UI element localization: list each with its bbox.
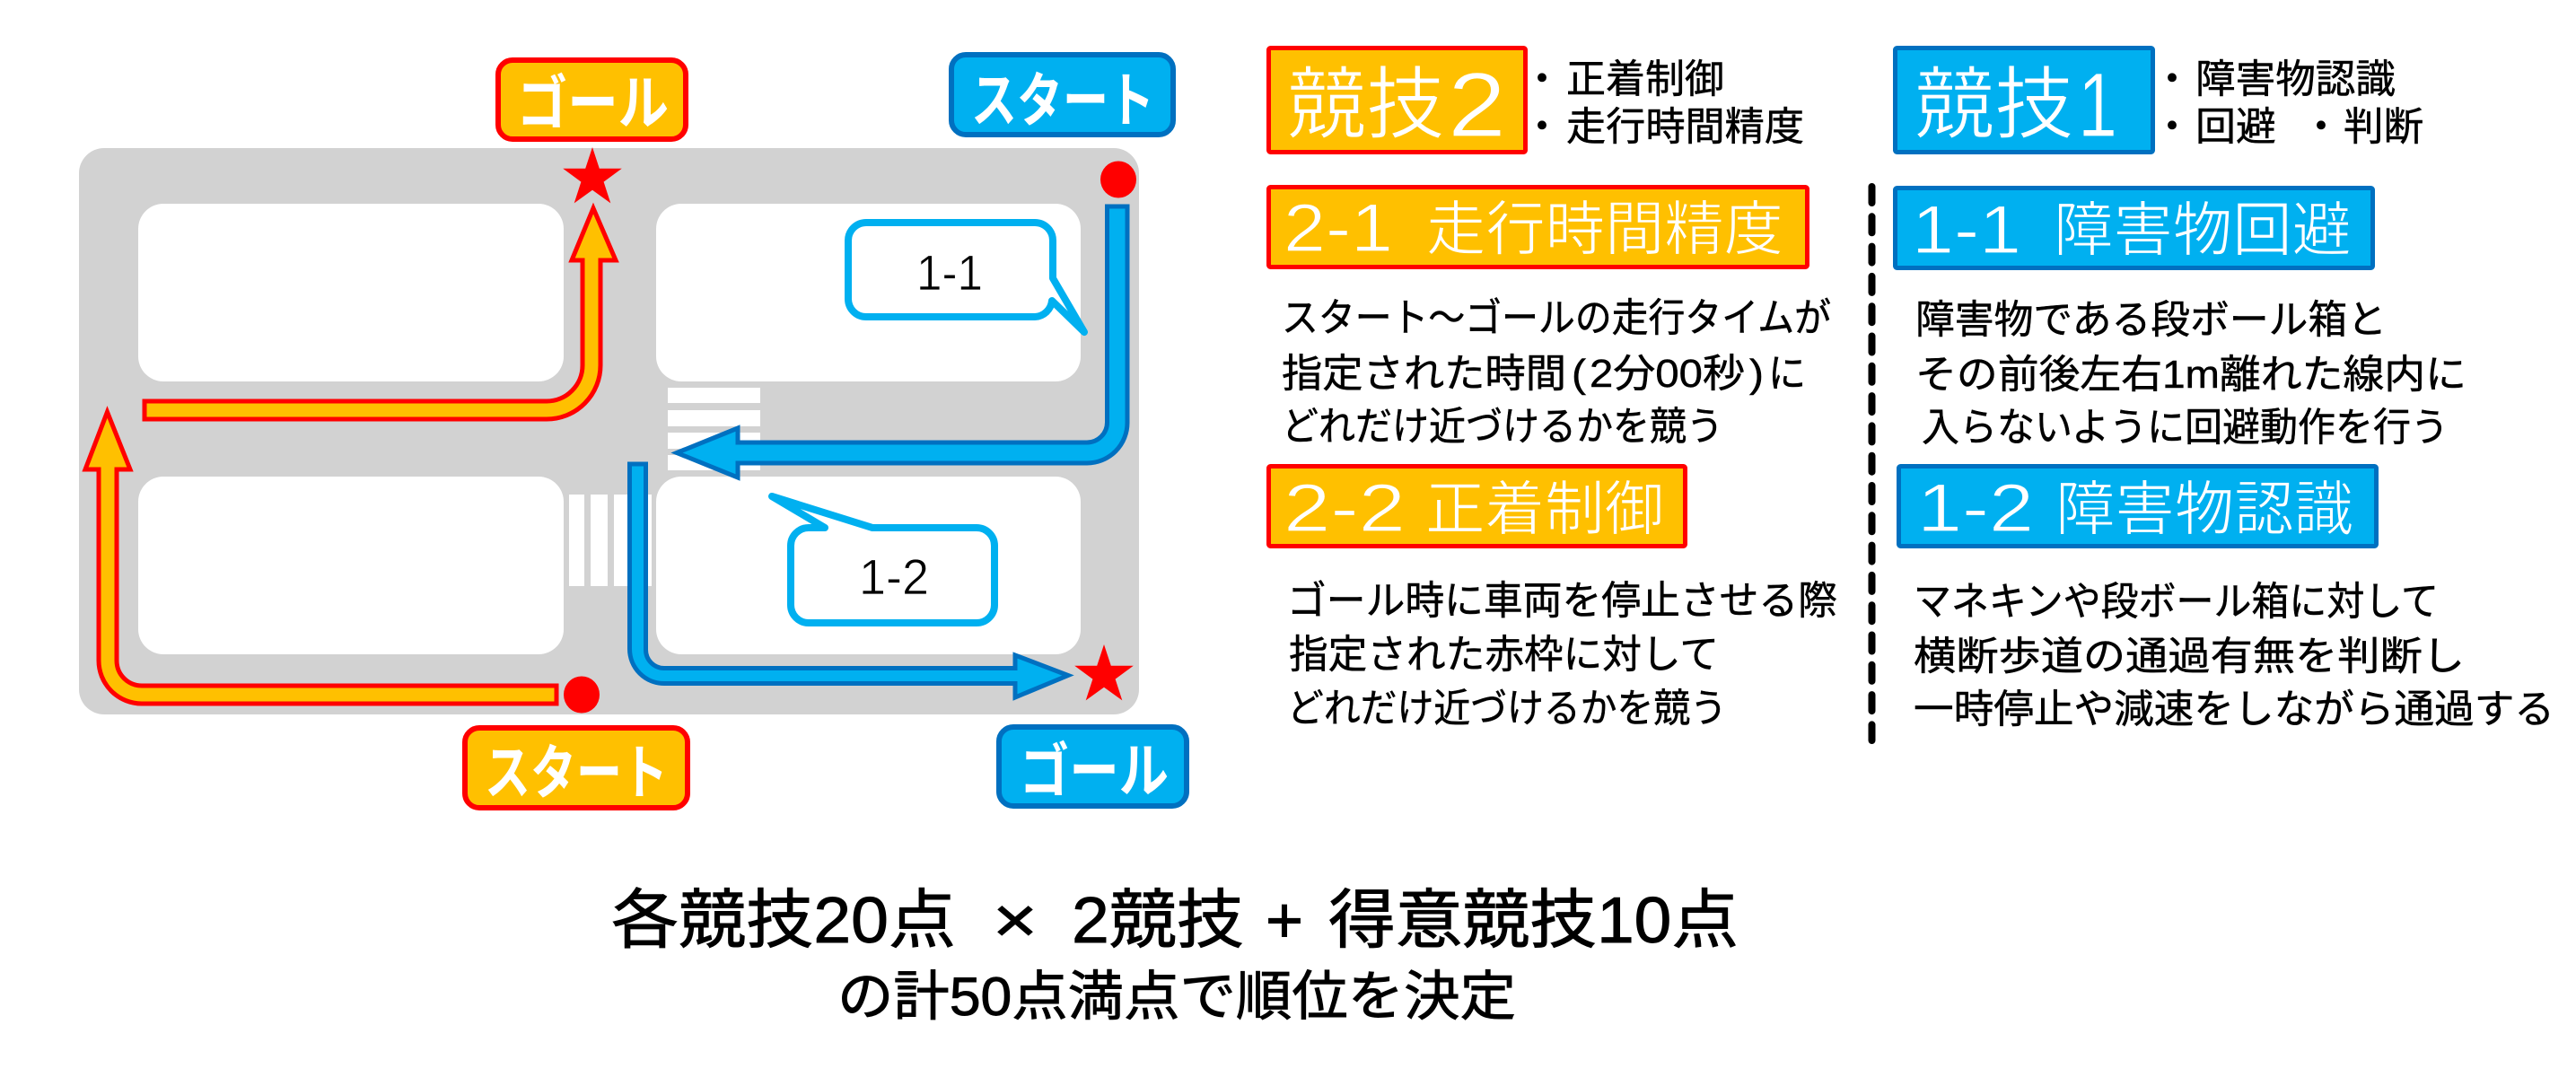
heading: event 1	[1896, 48, 2152, 156]
label: orange start: スタート	[485, 740, 668, 806]
subheading: 2-1: 2-1	[1284, 190, 1393, 267]
goal star: orange route	[563, 147, 622, 203]
text block: 1-1 description: 入らないように回避動作を行う	[1922, 406, 2449, 450]
subheading: 1-2: 障害物認識	[2055, 476, 2353, 542]
text block: scoring formula	[611, 885, 1739, 957]
text block: 2-1 description: )	[1749, 352, 1764, 396]
subheading: 1-1	[1896, 188, 2373, 268]
text block: 1-2 description	[1914, 580, 2554, 731]
text block: scoring formula: ×	[993, 885, 1038, 957]
subheading: 2-2	[1269, 467, 1686, 547]
text block: 1-2 description: 横断歩道の通過有無を判断し	[1914, 635, 2465, 679]
arrow: orange route second leg	[145, 208, 616, 419]
heading: event 2: 2	[1448, 54, 1506, 156]
text block: 2-1 description: スタート～ゴールの走行タイムが	[1282, 296, 1831, 340]
label: blue goal: ゴール	[1020, 738, 1169, 804]
list: event 2 topics: ・	[1522, 105, 1562, 149]
text block: 2-2 description: どれだけ近づけるかを競う	[1287, 687, 1727, 731]
heading: event 2	[1269, 48, 1526, 156]
subheading: 1-1: 1-1	[1912, 192, 2021, 268]
list: event 2 topics: ・	[1522, 57, 1562, 101]
heading: event 1: 競技	[1914, 60, 2074, 149]
subheading: 1-2: 1-2	[1917, 470, 2034, 547]
list: event 2 topics	[1522, 57, 1804, 149]
subheading: 2-2: 2-2	[1284, 470, 1406, 547]
text block: scoring formula: +	[1266, 885, 1303, 957]
list: event 1 topics: ・	[2152, 105, 2192, 149]
text block: 2-2 description: ゴール時に車両を停止させる際	[1287, 579, 1837, 623]
callout: 1-1	[848, 223, 1084, 332]
start point: blue route	[1100, 162, 1136, 197]
arrow: blue route second leg	[630, 464, 1068, 697]
start point: orange route	[564, 677, 600, 713]
subheading: 1-1: 障害物回避	[2054, 197, 2352, 263]
text block: 1-1 description: その前後左右1m離れた線内に	[1915, 353, 2466, 397]
label: blue start: スタート	[971, 67, 1154, 134]
city block: top left	[138, 204, 564, 381]
subheading: 2-1: 走行時間精度	[1426, 196, 1783, 262]
text block: 2-2 description	[1287, 579, 1837, 731]
list: event 2 topics: 走行時間精度	[1566, 105, 1804, 149]
text block: 2-1 description: (	[1572, 352, 1586, 396]
subheading: 1-2	[1899, 467, 2377, 547]
text block: scoring formula: 2競技	[1072, 885, 1244, 957]
text block: 1-1 description: 障害物である段ボール箱と	[1915, 298, 2387, 342]
goal star: blue route	[1074, 644, 1134, 700]
heading: event 2: 競技	[1287, 60, 1445, 149]
list: event 1 topics: 障害物認識	[2195, 57, 2396, 101]
arrow: orange route first leg	[85, 412, 556, 704]
panel: event 2 description	[1269, 48, 1837, 731]
crosswalk: vertical stripes	[569, 495, 652, 586]
callout: 1-2	[772, 496, 994, 623]
panel: event 1 description	[1896, 48, 2554, 731]
list: event 1 topics: 回避	[2195, 105, 2276, 149]
text block: 2-1 description: どれだけ近づけるかを競う	[1282, 405, 1723, 449]
label: orange goal: ゴール	[517, 70, 669, 136]
text block: 2-2 description: 指定された赤枠に対して	[1289, 633, 1719, 677]
callout: 1-2: 1-2	[859, 548, 929, 605]
city block: bottom left	[138, 477, 564, 654]
text block: scoring summary: の計50点満点で順位を決定	[837, 967, 1516, 1027]
list: event 2 topics: 正着制御	[1566, 57, 1724, 101]
list: event 1 topics: ・	[2152, 57, 2192, 101]
panel: course map	[79, 55, 1187, 808]
city block: bottom right	[656, 477, 1081, 654]
text block: 1-2 description: 一時停止や減速をしながら通過する	[1914, 688, 2554, 731]
road area	[79, 148, 1139, 714]
text block: 2-1 description: 2分00秒	[1590, 352, 1745, 396]
crosswalk: horizontal stripes	[668, 388, 760, 470]
list: event 1 topics: 判断	[2344, 105, 2423, 149]
list: event 1 topics	[2152, 57, 2423, 149]
subheading: 2-1	[1269, 187, 1808, 267]
label: blue start	[951, 55, 1173, 135]
text block: 1-1 description	[1915, 298, 2466, 450]
text block: scoring formula: 各競技20点	[611, 885, 956, 957]
text block: 2-1 description: 指定された時間	[1282, 352, 1566, 396]
text block: scoring formula: 得意競技10点	[1328, 885, 1739, 957]
city block: top right	[656, 204, 1081, 381]
text block: 2-1 description: に	[1768, 352, 1806, 396]
label: orange start	[465, 728, 688, 808]
callout: 1-1: 1-1	[916, 244, 983, 301]
list: event 1 topics: ・	[2301, 105, 2341, 149]
text block: 2-1 description	[1282, 296, 1831, 449]
subheading: 2-2: 正着制御	[1425, 476, 1664, 542]
heading: event 1: 1	[2078, 54, 2117, 156]
text block: 1-2 description: マネキンや段ボール箱に対して	[1914, 580, 2439, 624]
arrow: blue route first leg	[677, 206, 1127, 477]
